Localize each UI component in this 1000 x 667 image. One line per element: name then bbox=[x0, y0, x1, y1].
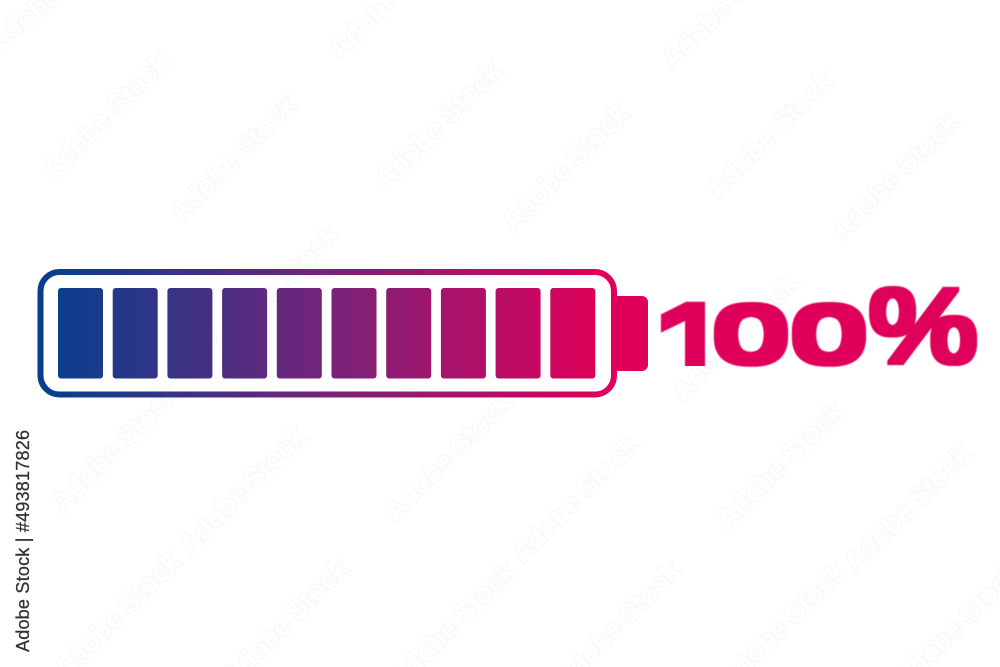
battery terminal cap bbox=[615, 296, 648, 371]
background watermark: Adobe Stock bbox=[164, 89, 303, 227]
background watermark: Adobe Stock bbox=[379, 388, 518, 526]
background watermark: Adobe Stock bbox=[711, 396, 850, 534]
background watermark: Adobe Stock bbox=[369, 56, 508, 194]
percentage label: 0 bbox=[710, 289, 792, 381]
background watermark: Adobe Stock bbox=[826, 107, 965, 245]
background watermark: Adobe Stock bbox=[506, 430, 645, 568]
battery outline bbox=[40, 272, 614, 394]
charge segments bbox=[58, 288, 595, 378]
background watermark: Adobe Stock bbox=[206, 219, 345, 357]
stock id side text: Adobe Stock | #493817826 bbox=[13, 430, 33, 652]
background watermark: Adobe Stock bbox=[46, 379, 185, 517]
background watermark: Adobe Stock bbox=[173, 421, 312, 559]
background watermark: Adobe Stock bbox=[838, 439, 977, 577]
percentage label: 1 bbox=[651, 280, 732, 407]
percentage label: 0 bbox=[788, 289, 870, 381]
background watermark: Adobe Stock bbox=[36, 47, 175, 185]
percentage label: % bbox=[868, 266, 978, 386]
battery icon bbox=[40, 272, 648, 394]
background watermark: Adobe Stock bbox=[496, 98, 635, 236]
background watermark: Adobe Stock bbox=[701, 65, 840, 203]
percentage label bbox=[660, 285, 978, 368]
background watermark: Adobe Stock bbox=[666, 268, 805, 406]
